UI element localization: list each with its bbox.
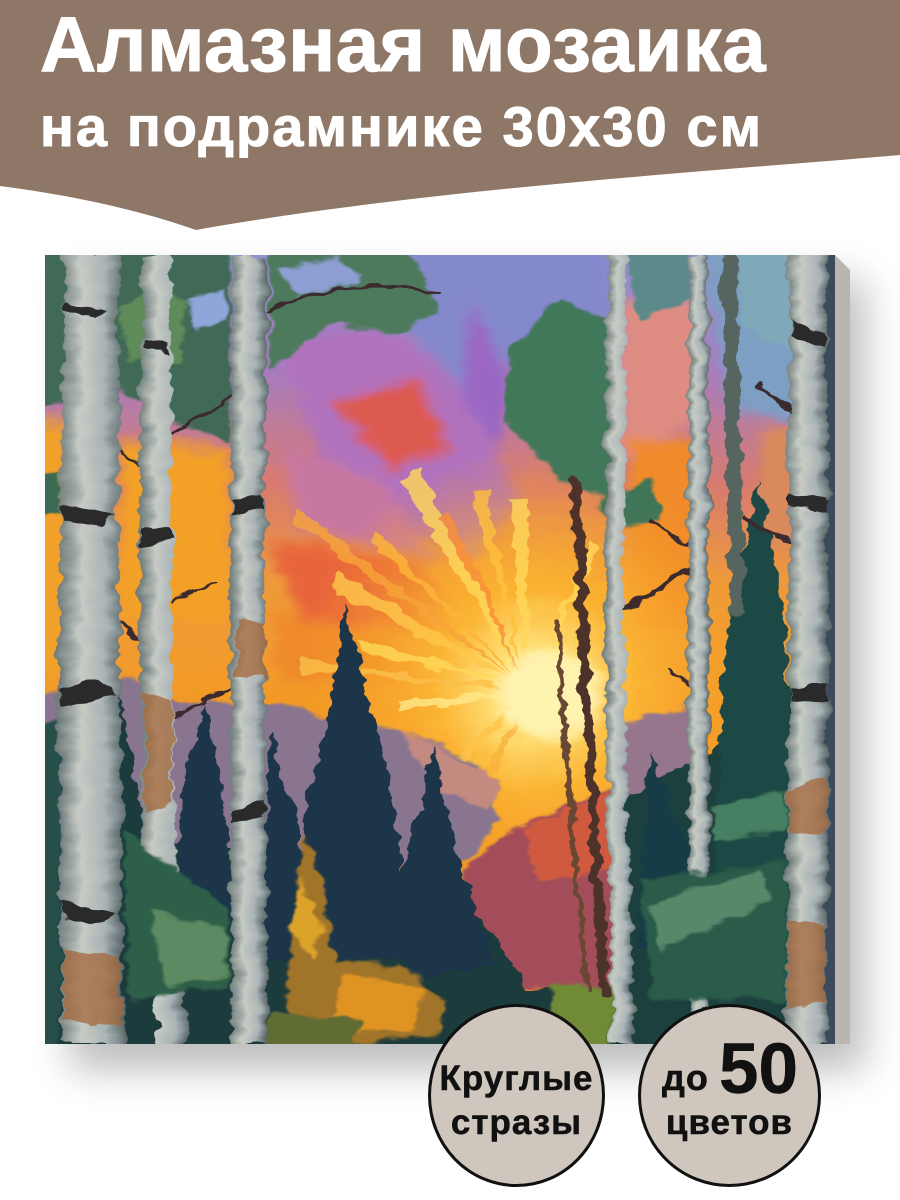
birch warm patches — [62, 620, 826, 1025]
sun rays — [290, 472, 600, 786]
autumn bushes — [262, 830, 612, 1060]
shadow — [70, 280, 865, 1070]
subtitle: на подрамнике 30х30 см — [40, 95, 763, 158]
title: Алмазная мозаика — [40, 0, 766, 88]
badge number: 50: 50 — [719, 1030, 798, 1109]
birch trunks — [58, 255, 829, 1044]
trunk 1 — [58, 255, 125, 1044]
trunk 4 — [605, 255, 634, 1044]
trunk 3 — [230, 255, 268, 1044]
trunk 6 — [786, 255, 829, 1044]
canvas painting — [45, 255, 886, 1092]
painting — [45, 255, 835, 1044]
sky colour patches — [45, 255, 794, 682]
upper foliage — [45, 255, 835, 1044]
canvas edge — [835, 255, 850, 1044]
thin dark trunks and branches — [105, 255, 790, 990]
trunk 5 — [688, 255, 709, 1010]
sky — [45, 255, 792, 992]
header banner — [0, 0, 900, 230]
sun glow — [328, 460, 691, 856]
fir trees — [120, 480, 790, 985]
forest floor — [54, 840, 616, 1044]
badge text: до: до — [662, 1057, 709, 1098]
sun core — [498, 651, 602, 739]
green foliage low — [125, 790, 786, 1000]
badge: round rhinestones: Круглые — [439, 1059, 594, 1098]
birch bark marks — [60, 300, 828, 925]
trunk 2 — [139, 255, 188, 1044]
badge text: цветов: цветов — [666, 1103, 793, 1142]
badge: up to 50 colours — [638, 1004, 821, 1187]
mountains — [30, 675, 700, 1000]
badge: round rhinestones: стразы — [451, 1103, 582, 1142]
badge: round rhinestones — [428, 1004, 605, 1187]
